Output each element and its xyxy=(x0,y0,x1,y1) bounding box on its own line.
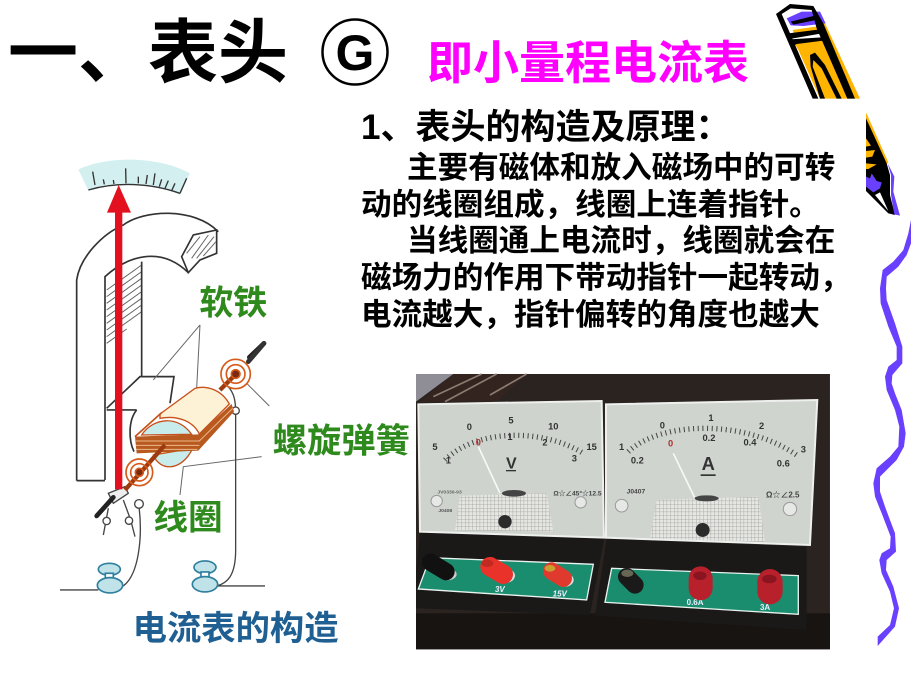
background wood and table xyxy=(416,374,830,649)
voltmeter base xyxy=(416,532,605,615)
ammeter face: Ω☆∠2.5 xyxy=(766,491,800,500)
ammeter face: 2 xyxy=(759,421,764,431)
terminal: right xyxy=(192,561,218,592)
ammeter face: 0.4 xyxy=(743,438,757,448)
label: coil: 线圈 xyxy=(153,499,223,537)
heading: structure and principle: 1、表头的构造及原理： xyxy=(361,108,730,147)
voltmeter face: 15 xyxy=(586,442,597,452)
permanent magnet xyxy=(77,213,218,481)
caption: ammeter structure: 电流表的构造 xyxy=(133,610,339,648)
ammeter face: J0407 xyxy=(627,488,645,495)
label: spiral spring: 螺旋弹簧 xyxy=(273,423,410,461)
voltmeter face: 0 xyxy=(476,438,481,448)
voltmeter face: 1 xyxy=(446,455,451,465)
cylinder core xyxy=(142,421,192,435)
ammeter base xyxy=(595,538,807,630)
voltmeter face: 5 xyxy=(432,442,438,452)
ammeter terminal strip: 0.6A xyxy=(687,598,704,607)
pencil lower part xyxy=(866,112,900,216)
ammeter face: 0 xyxy=(668,439,673,449)
ammeter face: 1 xyxy=(619,442,624,452)
paragraph one: 动的线圈组成，线圈上连着指针。 xyxy=(361,188,820,222)
ammeter face: 3 xyxy=(801,445,806,455)
pointer shaft ends xyxy=(97,343,264,516)
voltmeter terminal strip: 3V xyxy=(495,585,505,594)
paragraph two xyxy=(361,224,850,332)
voltmeter face: Ω☆∠45°☆12.5 xyxy=(553,489,602,498)
photo: voltmeter and ammeter xyxy=(416,374,830,649)
paragraph two: 当线圈通上电流时，线圈就会在 xyxy=(407,224,835,258)
paragraph one xyxy=(361,151,835,222)
ammeter face xyxy=(606,400,817,545)
leader lines xyxy=(153,325,269,495)
voltmeter face: V xyxy=(506,455,517,472)
voltmeter face: 5 xyxy=(508,415,514,425)
subtitle: 即小量程电流表 xyxy=(427,37,749,89)
terminal: left xyxy=(97,563,123,593)
voltmeter face: J0408 xyxy=(438,508,452,514)
top spring xyxy=(221,359,250,389)
scale dial xyxy=(78,160,190,195)
voltmeter face: 2 xyxy=(542,438,548,448)
bottom spring xyxy=(126,459,153,486)
wires and terminals xyxy=(60,387,265,590)
shaft xyxy=(125,373,237,490)
pencil upper part xyxy=(776,4,860,99)
voltmeter face: 3 xyxy=(572,454,577,464)
label: soft iron: 软铁 xyxy=(199,284,267,322)
coil windings xyxy=(135,404,234,453)
ammeter face: A xyxy=(702,453,715,474)
voltmeter face: JV0330-93 xyxy=(437,490,462,496)
icon: galvanometer symbol G: G xyxy=(336,25,374,81)
ammeter face: 0.6 xyxy=(777,459,790,469)
paragraph one: 主要有磁体和放入磁场中的可转 xyxy=(407,151,835,185)
voltmeter terminal strip xyxy=(418,558,593,600)
ammeter terminal strip xyxy=(605,568,798,614)
red pointer xyxy=(107,185,131,489)
text block: structure and principle xyxy=(361,108,850,332)
paragraph two: 电流越大，指针偏转的角度也越大 xyxy=(361,298,820,332)
title: 一、表头 xyxy=(8,14,288,92)
icon: pencil xyxy=(776,4,900,216)
diagram: ammeter structure xyxy=(60,160,410,648)
ammeter face: 1 xyxy=(708,413,714,423)
ammeter face: 0.2 xyxy=(702,433,715,443)
ammeter face: 0.2 xyxy=(631,455,644,465)
decoration: purple squiggle xyxy=(873,220,911,646)
voltmeter face: 0 xyxy=(467,422,472,432)
voltmeter face xyxy=(418,401,604,538)
moving coil with springs xyxy=(125,343,264,490)
paragraph two: 磁场力的作用下带动指针一起转动， xyxy=(361,261,850,295)
voltmeter terminal strip: 15V xyxy=(553,590,568,599)
voltmeter face: 10 xyxy=(548,421,559,431)
ammeter face: 0 xyxy=(660,420,665,430)
voltmeter face: 1 xyxy=(507,432,513,442)
ammeter terminal strip: 3A xyxy=(760,603,770,612)
icon: galvanometer symbol G xyxy=(322,20,388,84)
